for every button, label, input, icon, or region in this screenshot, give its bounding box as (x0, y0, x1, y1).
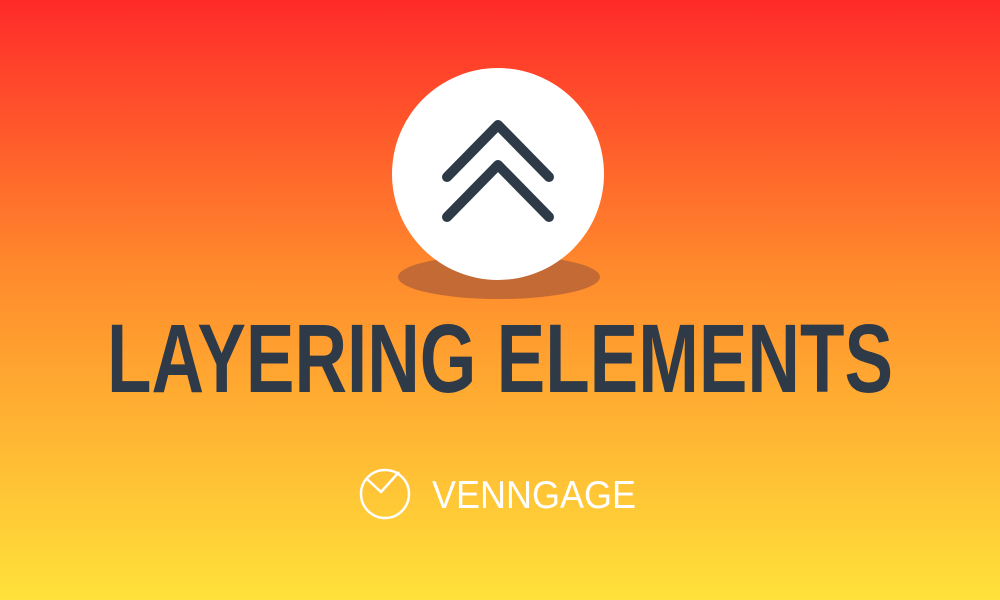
logo text: VENNGAGE (432, 474, 636, 517)
logo (361, 470, 636, 518)
chevrons (447, 125, 549, 217)
logo icon (361, 470, 409, 518)
icon: chevrons circle (392, 68, 604, 299)
circle (392, 68, 604, 280)
shadow (398, 255, 600, 299)
